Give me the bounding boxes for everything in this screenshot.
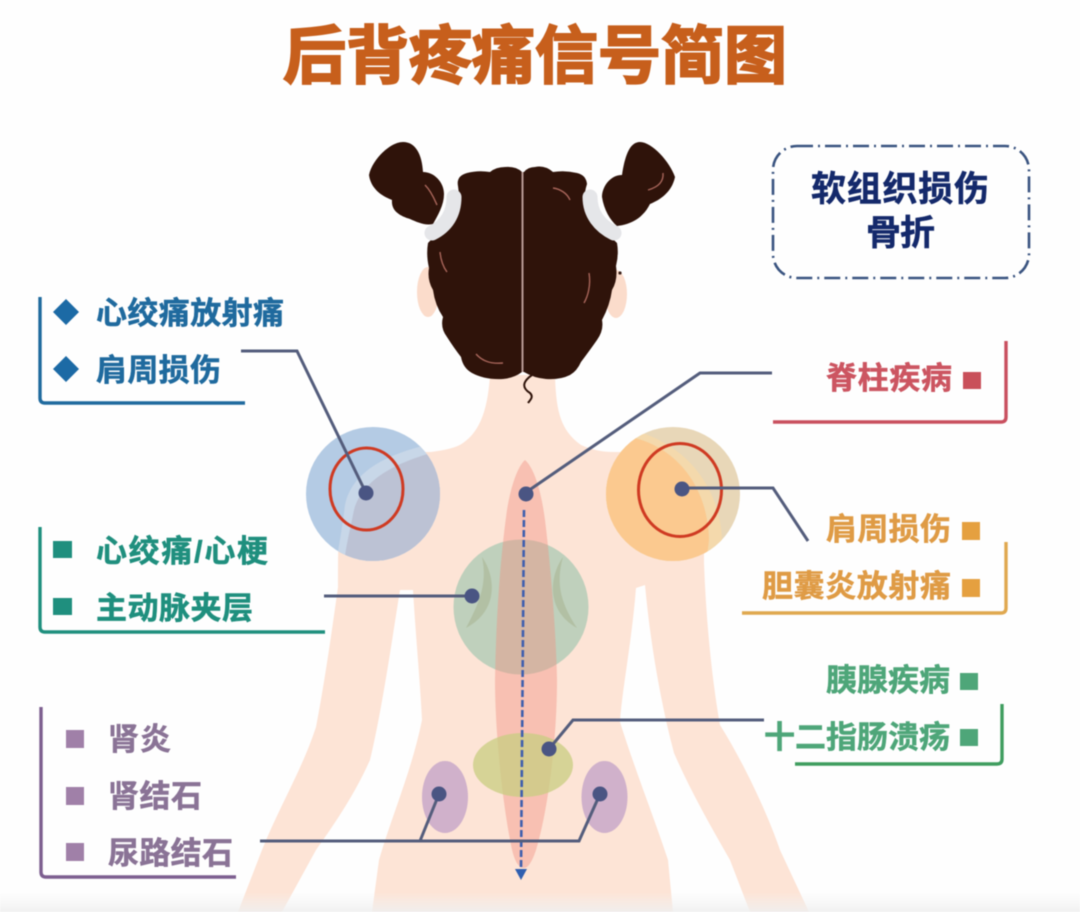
label: 脊柱疾病 — [826, 361, 952, 396]
zone: chest green — [454, 540, 588, 674]
mole — [618, 271, 622, 275]
bracket blue — [40, 297, 245, 403]
bracket red — [773, 341, 1006, 422]
label: 肩周损伤 — [826, 512, 951, 547]
pain point dots — [358, 482, 690, 802]
icon: square — [960, 673, 978, 690]
label: 胆囊炎放射痛 — [762, 569, 951, 604]
bracket orange — [742, 542, 1006, 613]
icon: square — [962, 579, 980, 597]
red circle right — [638, 444, 722, 536]
label: 胰腺疾病 — [826, 663, 950, 698]
icon: diamond — [53, 299, 79, 325]
zone: pancreas yellow — [473, 733, 573, 797]
icon: square — [960, 729, 978, 746]
bracket green — [795, 704, 1002, 764]
icon: square — [962, 522, 980, 540]
hair parting and wisp — [522, 172, 532, 403]
icon: square — [66, 843, 84, 861]
label: 心绞痛/心梗 — [96, 534, 268, 569]
label: 主动脉夹层 — [96, 591, 253, 626]
dashed box — [773, 146, 1029, 278]
label: 心绞痛放射痛 — [96, 296, 284, 331]
hair bands — [432, 197, 614, 233]
zone: left shoulder blue — [306, 426, 440, 562]
label: 十二指肠溃疡 — [764, 720, 950, 755]
red circle left — [330, 448, 403, 530]
label: 骨折 — [866, 214, 935, 253]
zone: left kidney — [422, 761, 468, 833]
panel: shoulder and gallbladder orange — [742, 512, 1006, 613]
icon: square — [963, 372, 981, 389]
leader lines — [241, 351, 808, 841]
figure: back of woman with pain zones — [238, 142, 809, 912]
label: 尿路结石 — [108, 836, 233, 871]
right hair bun — [602, 142, 675, 226]
panel: pancreas and duodenum green — [764, 663, 1002, 764]
ears — [417, 267, 627, 318]
hair highlights — [425, 173, 663, 363]
label: 肩周损伤 — [96, 353, 221, 388]
icon: square — [66, 787, 84, 805]
zone: spine — [495, 460, 557, 868]
dashed spine arrow — [515, 510, 527, 880]
callout: soft tissue injury and fracture — [773, 146, 1029, 278]
left hair bun — [369, 142, 444, 225]
label: 肾结石 — [108, 779, 202, 814]
panel: kidney purple — [41, 707, 236, 877]
hair — [427, 167, 618, 379]
icon: square — [66, 730, 84, 748]
panel: heart and aorta teal — [40, 527, 325, 632]
icon: square — [53, 598, 72, 615]
body silhouette — [238, 375, 809, 912]
label: 肾炎 — [108, 722, 171, 757]
zone: right shoulder orange — [606, 426, 740, 562]
icon: square — [53, 541, 72, 558]
icon: diamond — [53, 356, 79, 382]
bracket teal — [40, 527, 325, 632]
label: 软组织损伤 — [811, 170, 989, 209]
zone: right kidney — [582, 761, 628, 833]
panel: spine red — [773, 341, 1006, 422]
panel: shoulder and angina blue — [40, 296, 284, 403]
bracket purple — [41, 707, 236, 877]
title: 后背疼痛信号简图 — [283, 22, 787, 92]
